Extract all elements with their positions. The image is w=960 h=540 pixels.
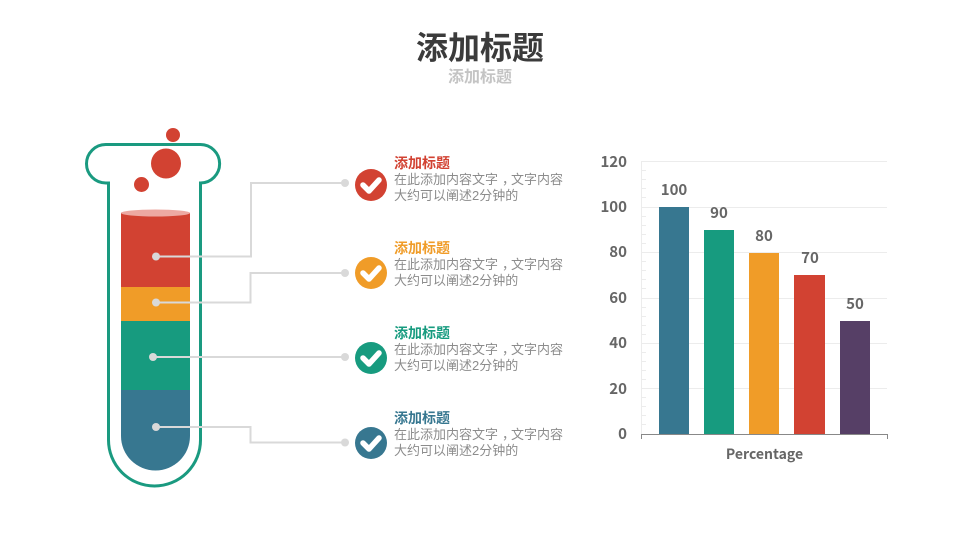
icon: green check: [355, 342, 387, 374]
subtitle: 添加标题: [448, 68, 512, 86]
bar value labels: 90: [710, 202, 728, 223]
item 3 text: 大约可以阐述2分钟的: [394, 358, 518, 373]
y axis labels: 100: [600, 196, 627, 217]
test tube illustration: [86, 128, 220, 486]
tube outline: [86, 144, 220, 486]
bar chart: [600, 151, 888, 464]
bar value labels: 50: [846, 293, 864, 314]
y axis labels: 120: [600, 151, 627, 172]
item 1 heading: 添加标题: [394, 155, 450, 171]
item 2 text: 大约可以阐述2分钟的: [394, 273, 518, 288]
item 4 text: 在此添加内容文字 ，文字内容: [394, 427, 563, 442]
bars: [659, 207, 870, 434]
connector: green: [149, 353, 349, 361]
icon: blue check: [355, 427, 387, 459]
item 4: [355, 410, 563, 459]
y axis labels: 20: [609, 378, 627, 399]
item 2 heading: 添加标题: [394, 240, 450, 256]
y axis labels: 40: [609, 332, 627, 353]
item 4 text: [394, 427, 563, 458]
liquid surface: [121, 210, 190, 216]
liquid: blue layer: [121, 390, 190, 470]
bar value labels: [661, 179, 864, 314]
x axis title: Percentage: [726, 444, 803, 464]
item 1 text: 在此添加内容文字 ，文字内容: [394, 172, 563, 187]
icon: orange check: [355, 257, 387, 289]
item 1: [355, 155, 563, 203]
y axis labels: 0: [618, 423, 627, 444]
x axis: [642, 434, 888, 439]
bar value labels: 70: [801, 247, 819, 268]
liquid: red layer: [121, 213, 190, 287]
connector: blue: [152, 423, 349, 446]
icon: red check: [355, 169, 387, 201]
connector: red: [152, 179, 349, 260]
item 3 heading: 添加标题: [394, 325, 450, 341]
item 1 text: 大约可以阐述2分钟的: [394, 188, 518, 203]
connector: orange: [152, 269, 349, 306]
item 3 text: 在此添加内容文字 ，文字内容: [394, 342, 563, 357]
item 4 heading: 添加标题: [394, 410, 450, 426]
bar value labels: 100: [661, 179, 687, 200]
liquid: green layer: [121, 321, 190, 390]
title: 添加标题: [416, 30, 544, 66]
y axis labels: 60: [609, 287, 627, 308]
item 4 text: 大约可以阐述2分钟的: [394, 443, 518, 458]
item 1 text: [394, 172, 563, 203]
item 2: [355, 240, 563, 289]
item 3: [355, 325, 563, 374]
bar value labels: 80: [755, 225, 773, 246]
item 2 text: [394, 257, 563, 288]
item 3 text: [394, 342, 563, 373]
bubbles: [134, 128, 181, 192]
y axis labels: 80: [609, 241, 627, 262]
liquid: orange layer: [121, 287, 190, 321]
y axis labels: [600, 151, 627, 444]
item 2 text: 在此添加内容文字 ，文字内容: [394, 257, 563, 272]
